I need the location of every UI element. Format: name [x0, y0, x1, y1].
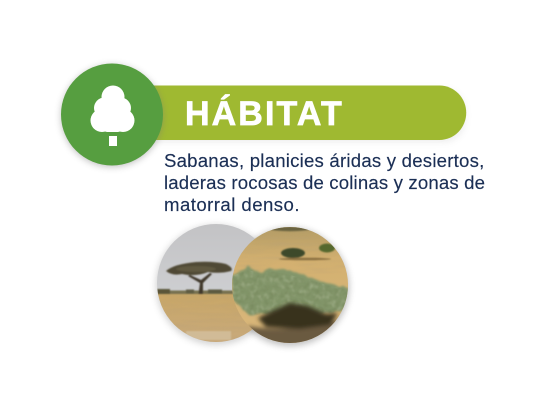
- icon: tree: [90, 86, 134, 146]
- photo: acacia tree on savanna: [157, 224, 255, 342]
- text block: habitat description: matorral denso.: [164, 194, 300, 215]
- photo: shrubs on dry grassland: [232, 227, 348, 343]
- text block: habitat description: laderas rocosas de colinas y zonas de: [164, 172, 485, 193]
- heading: HÁBITAT: [185, 95, 344, 133]
- photo shadows: [156, 225, 349, 346]
- text block: habitat description: Sabanas, planicies áridas y desiertos,: [164, 150, 484, 171]
- title bar: [120, 86, 466, 142]
- icon: tree badge: [61, 64, 163, 167]
